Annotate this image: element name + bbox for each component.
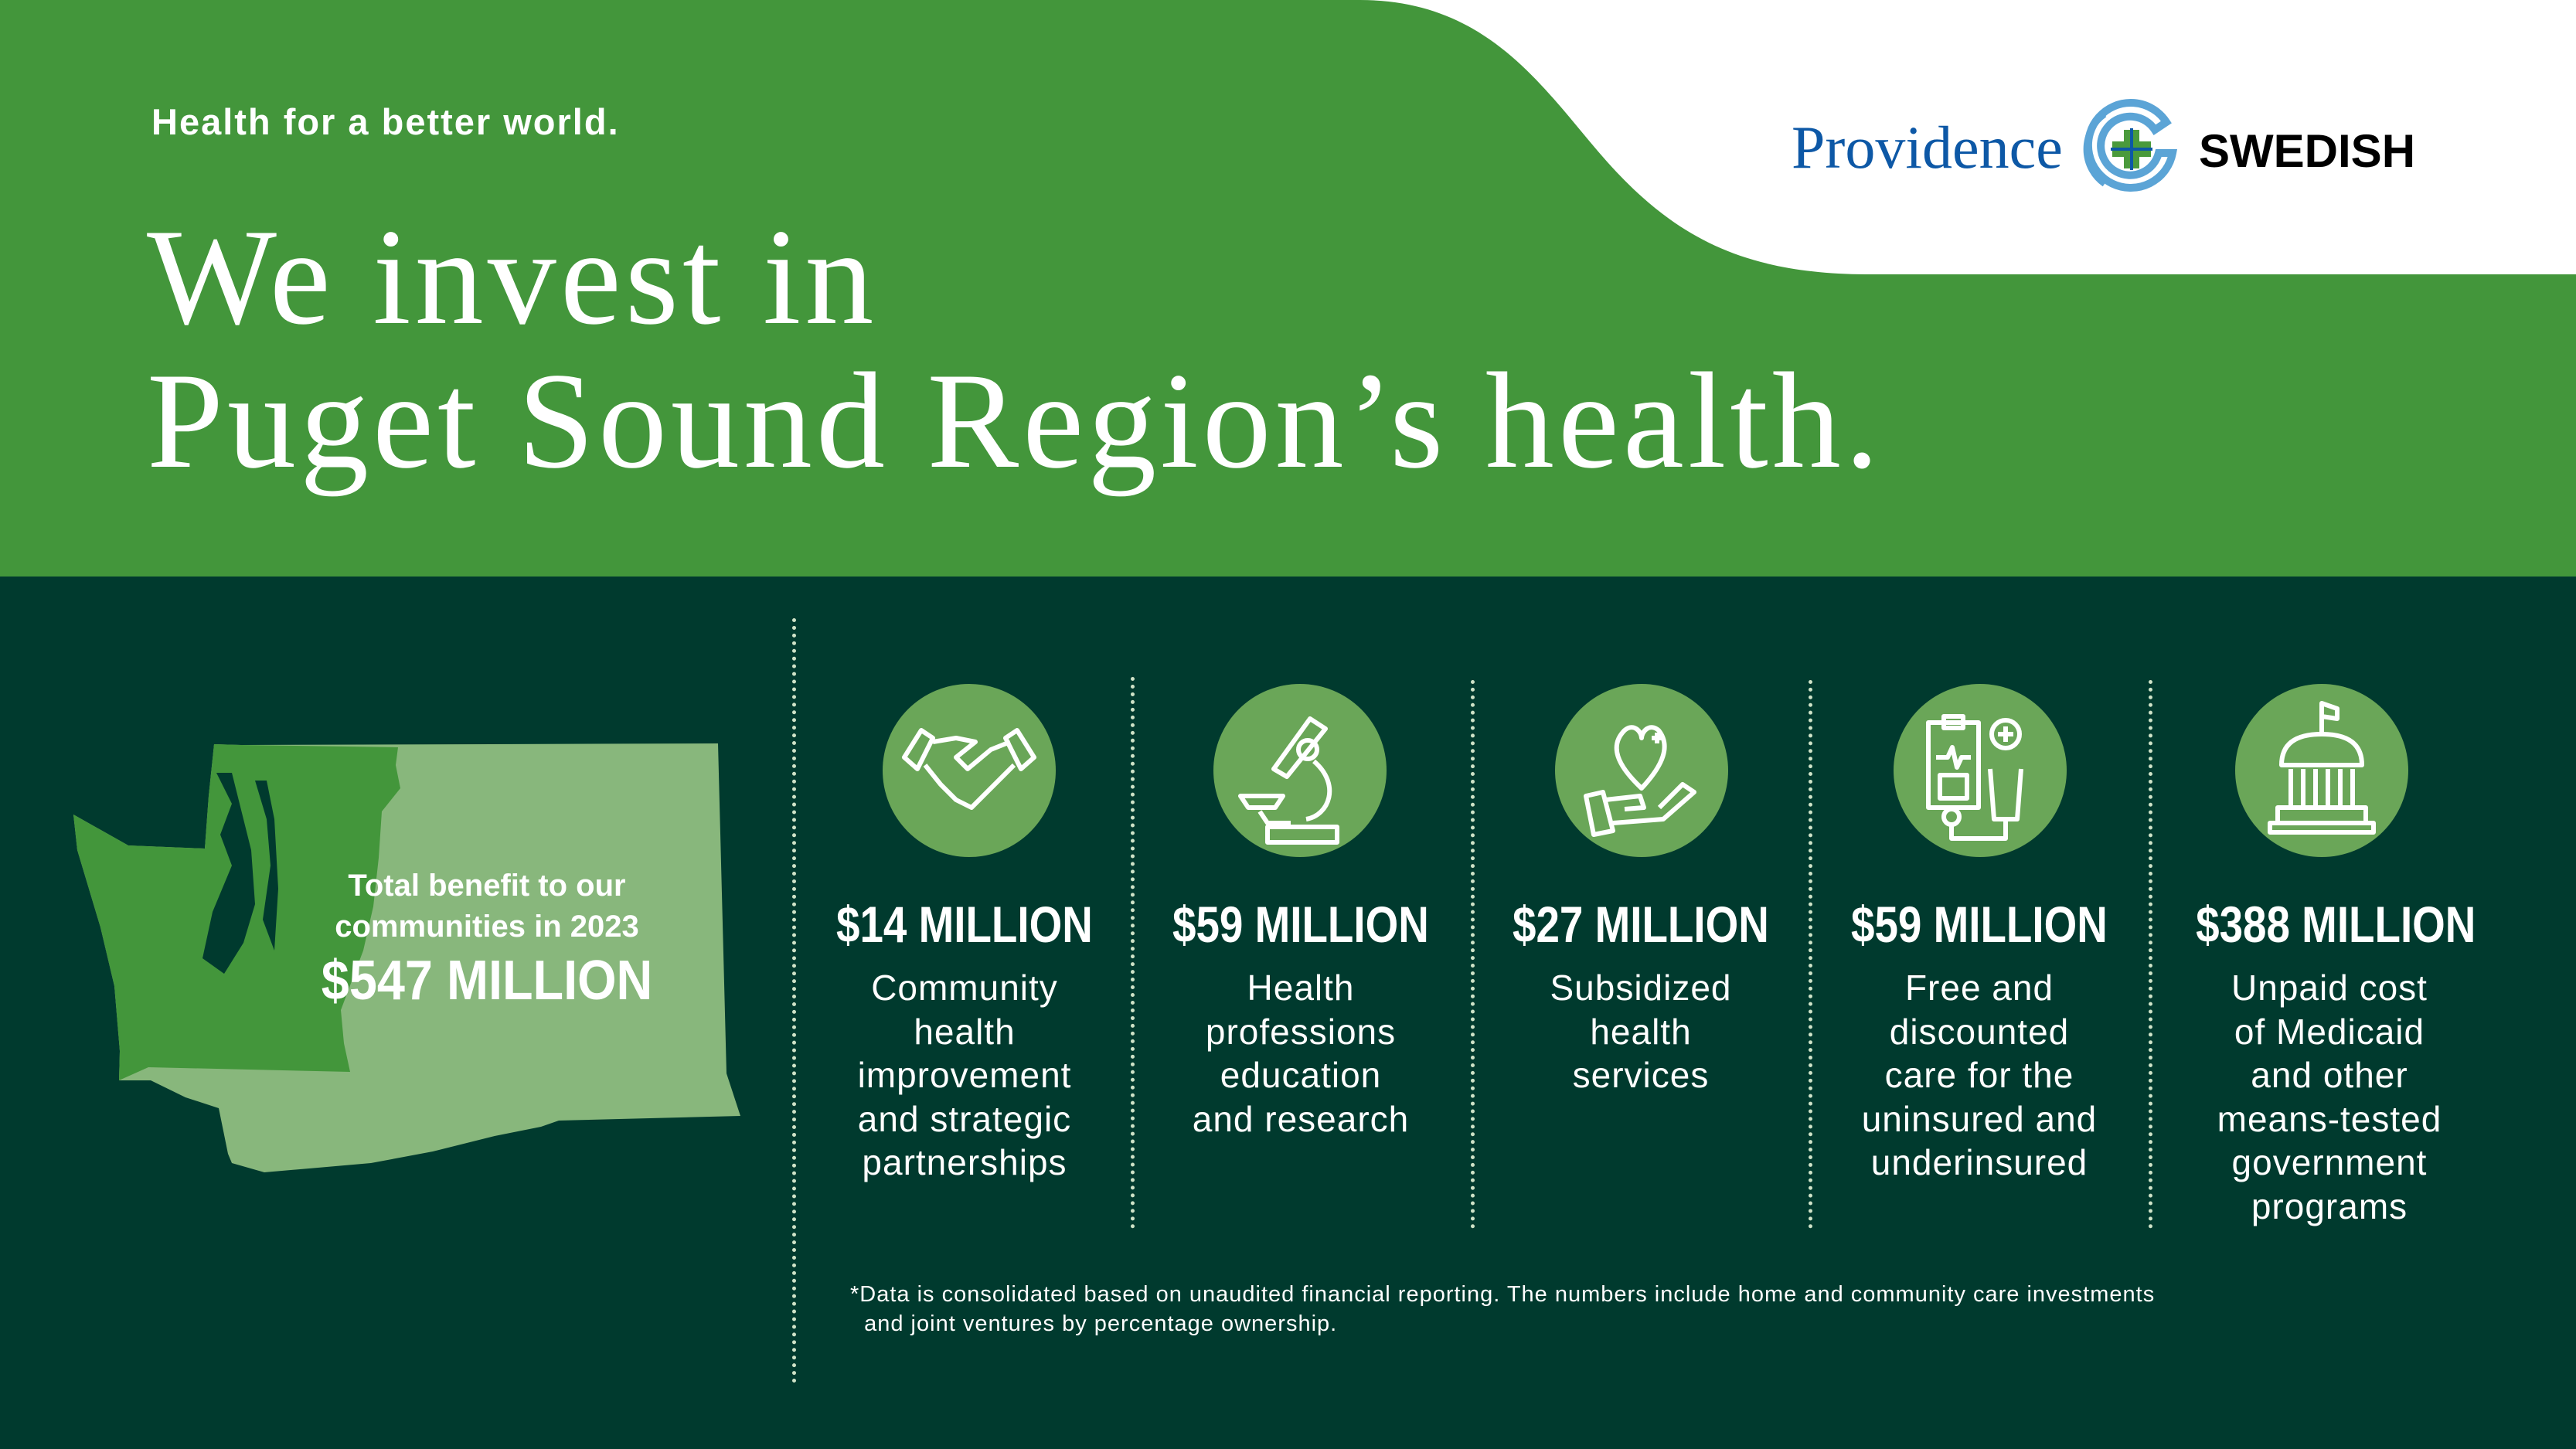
stat 2 (1172, 896, 1429, 1139)
text: Free and (1905, 968, 2054, 1008)
stat 5 (2196, 896, 2476, 1226)
text: services (1573, 1055, 1709, 1095)
map of Washington (73, 743, 740, 1172)
title: Puget Sound Region’s health. (147, 344, 1883, 497)
footnote: *Data is consolidated based on unaudited financial reporting. The numbers include home and community care investments (850, 1282, 2155, 1307)
logo: SWEDISH wordmark: SWEDISH (2199, 125, 2415, 177)
stat 3 (1513, 896, 1769, 1095)
text: $59 MILLION (1851, 896, 2108, 953)
text: programs (2251, 1185, 2408, 1226)
dividers (792, 618, 796, 1383)
text: professions (1206, 1011, 1396, 1051)
text: health (1590, 1011, 1692, 1051)
icon: handshake (883, 684, 1056, 857)
logo (1792, 99, 2415, 192)
footnote (850, 1282, 2155, 1336)
text: Health (1247, 968, 1354, 1008)
text: Subsidized (1550, 968, 1732, 1008)
text: means-tested (2217, 1099, 2442, 1139)
text: underinsured (1871, 1142, 2088, 1182)
text: Unpaid cost (2231, 968, 2428, 1008)
text: uninsured and (1862, 1099, 2097, 1139)
title: We invest in (147, 200, 877, 353)
text: $59 MILLION (1172, 896, 1429, 953)
stat 1 (836, 896, 1093, 1182)
text: and other (2251, 1055, 2408, 1095)
text: education (1220, 1055, 1381, 1095)
text: government (2232, 1142, 2427, 1182)
text: partnerships (862, 1142, 1067, 1182)
text: $388 MILLION (2196, 896, 2476, 953)
text: Community (871, 968, 1058, 1008)
logo: emblem (2084, 99, 2177, 192)
text: and strategic (858, 1099, 1071, 1139)
tagline: Health for a better world. (151, 101, 620, 142)
map callout text: Total benefit to our (348, 869, 626, 903)
map callout text (322, 869, 652, 1012)
text: $27 MILLION (1513, 896, 1769, 953)
text: of Medicaid (2234, 1011, 2425, 1051)
icon: government building (2235, 684, 2408, 857)
text: $14 MILLION (836, 896, 1093, 953)
icon: clipboard and stethoscope (1894, 684, 2067, 857)
footnote: and joint ventures by percentage ownership. (864, 1311, 1337, 1336)
map callout text: $547 MILLION (322, 950, 652, 1012)
header background (0, 0, 2576, 577)
text: care for the (1885, 1055, 2074, 1095)
text: health (914, 1011, 1016, 1051)
text: discounted (1890, 1011, 2069, 1051)
icon: microscope (1213, 684, 1387, 857)
logo: Providence wordmark: Providence (1792, 114, 2063, 181)
title (147, 200, 1883, 497)
map callout text: communities in 2023 (335, 910, 639, 944)
stat 4 (1851, 896, 2108, 1182)
text: and research (1193, 1099, 1409, 1139)
icon: heart in hand (1555, 684, 1728, 857)
text: improvement (858, 1055, 1071, 1095)
